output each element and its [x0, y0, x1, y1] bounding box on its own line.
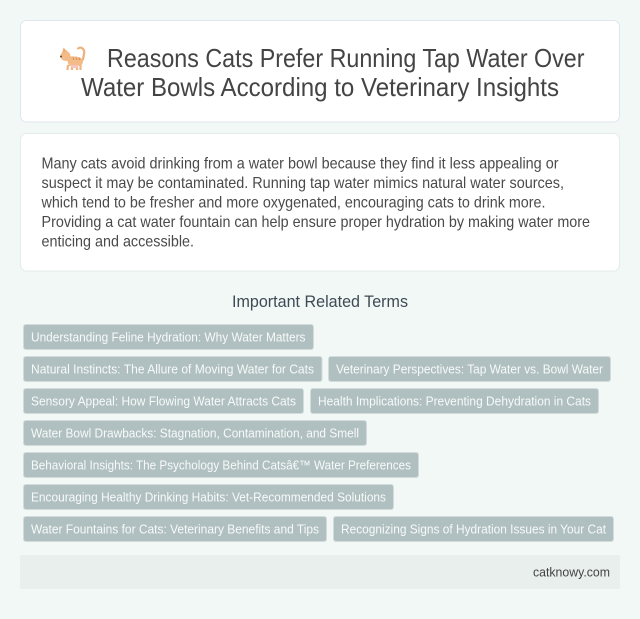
footer [20, 555, 620, 589]
title: Water Bowls According to Veterinary Insights [81, 72, 559, 102]
title: Reasons Cats Prefer Running Tap Water Over [107, 43, 585, 73]
text block: description [41, 156, 590, 250]
title [81, 43, 585, 102]
tag: Water Bowl Drawbacks: Stagnation, Contamination, and Smell [31, 426, 359, 440]
tag: Health Implications: Preventing Dehydration in Cats [318, 394, 591, 408]
panel: title card [20, 20, 620, 122]
text block: description: Providing a cat water fountain can help ensure proper hydration by making water more [42, 214, 590, 231]
tag list [24, 324, 614, 542]
tag: Encouraging Healthy Drinking Habits: Vet-Recommended Solutions [31, 490, 386, 504]
text block: description: which tend to be fresher and more oxygenated, encouraging cats to drink more. [41, 194, 546, 212]
tag: Behavioral Insights: The Psychology Behind Catsâ€™ Water Preferences [31, 458, 411, 472]
tag [24, 420, 366, 446]
tag: Recognizing Signs of Hydration Issues in Your Cat [341, 522, 606, 536]
tag [24, 484, 394, 510]
tag [24, 516, 326, 542]
tag: Veterinary Perspectives: Tap Water vs. Bowl Water [336, 362, 604, 376]
tag [334, 516, 614, 542]
tag [24, 356, 322, 382]
text block: description: enticing and accessible. [42, 234, 194, 250]
footer: catknowy.com [533, 564, 610, 580]
panel: description [20, 134, 620, 271]
icon: cat [60, 48, 84, 70]
text block: description: Many cats avoid drinking from a water bowl because they find it less appealing or [42, 156, 559, 172]
heading: related terms: Important Related Terms [232, 293, 408, 311]
tag [24, 324, 314, 350]
tag [310, 388, 598, 414]
tag: Water Fountains for Cats: Veterinary Benefits and Tips [31, 522, 319, 536]
tag [328, 356, 610, 382]
tag [24, 452, 418, 478]
tag: Sensory Appeal: How Flowing Water Attracts Cats [31, 394, 296, 408]
tag [24, 388, 304, 414]
tag: Natural Instincts: The Allure of Moving Water for Cats [31, 362, 314, 376]
text block: description: suspect it may be contaminated. Running tap water mimics natural water sources, [42, 175, 564, 192]
tag: Understanding Feline Hydration: Why Water Matters [31, 330, 306, 344]
